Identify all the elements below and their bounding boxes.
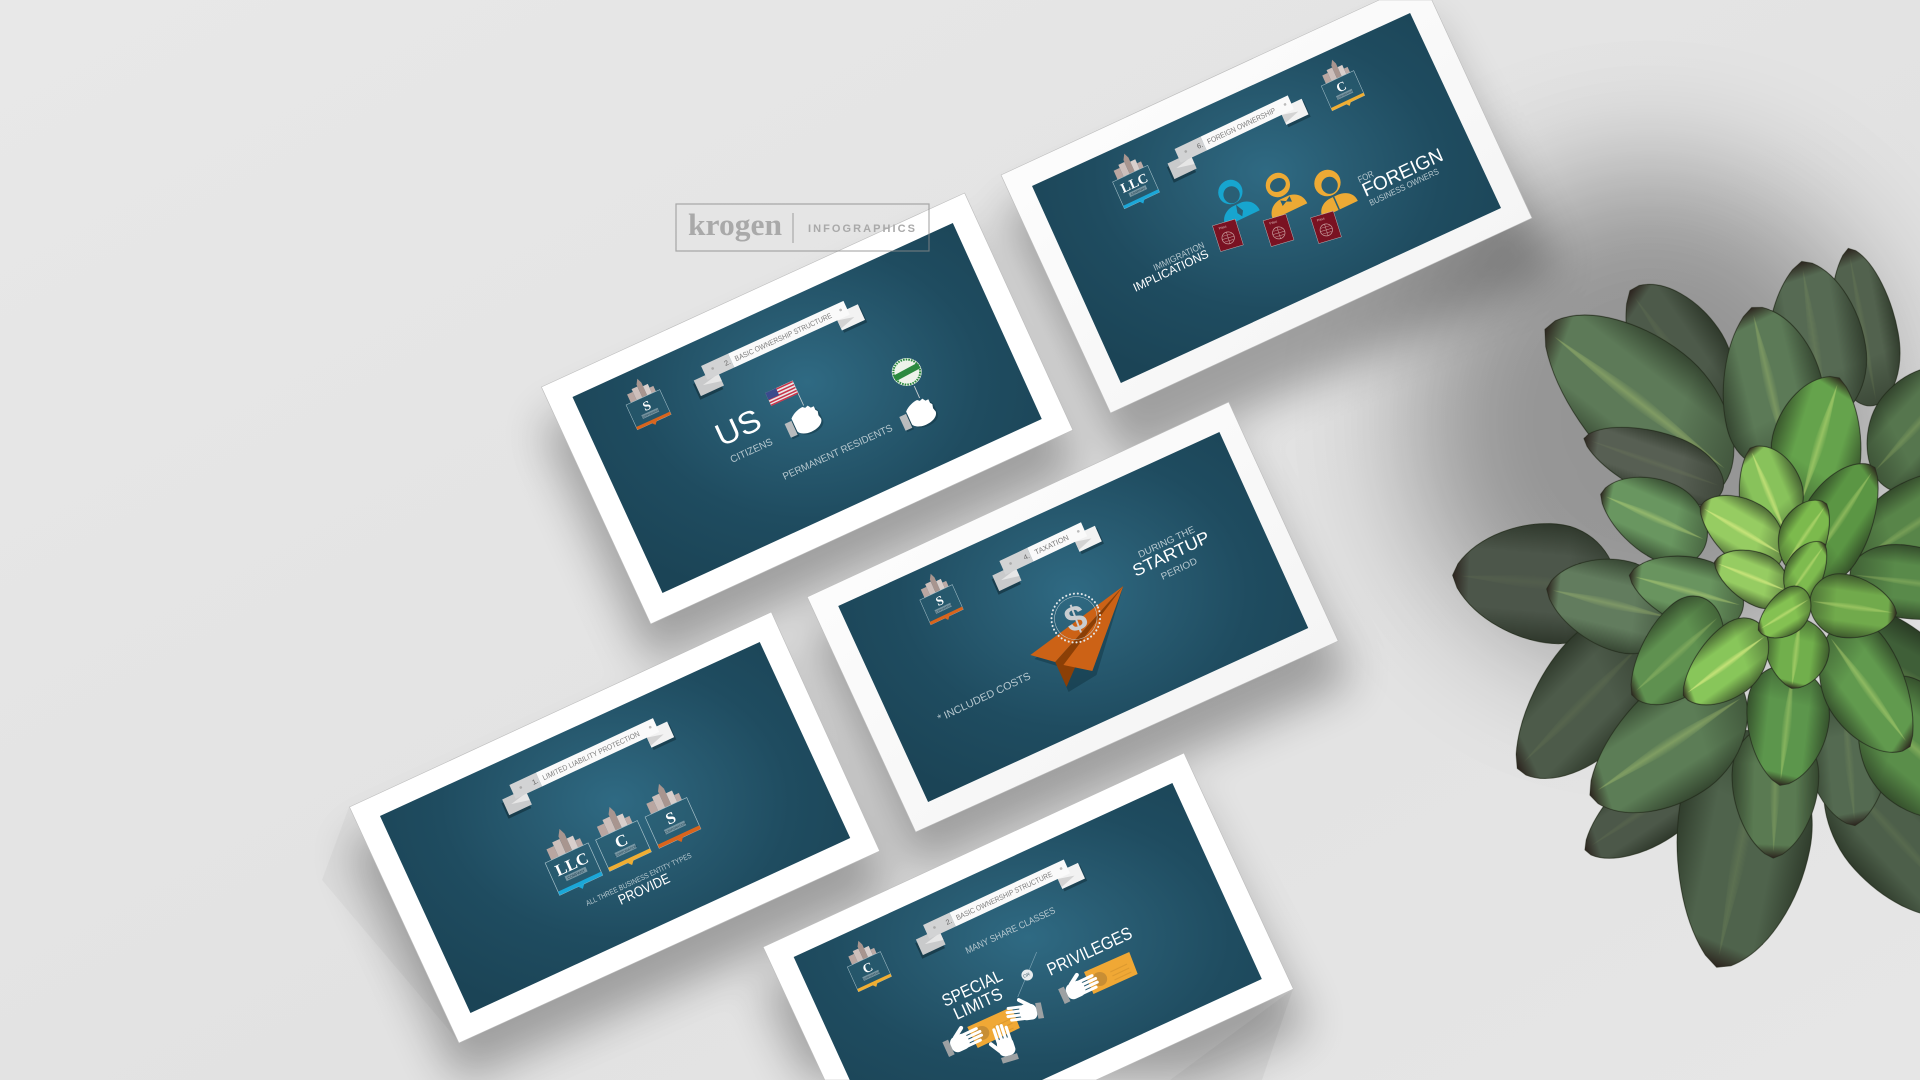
badge: C corporation: C bbox=[1334, 78, 1349, 95]
badge: C corporation: CORPORATION bbox=[1336, 90, 1354, 100]
text: included costs: * INCLUDED COSTS bbox=[936, 670, 1032, 725]
badge: C corporation bbox=[839, 934, 893, 995]
logo: krogen infographics: INFOGRAPHICS bbox=[808, 223, 915, 235]
icon: orange business owner bbox=[1256, 166, 1307, 220]
text: US: US bbox=[710, 402, 767, 453]
icon: green card stamp on stick bbox=[892, 358, 922, 398]
badge: LLC company: LLC bbox=[552, 848, 591, 880]
icon: hand holding privileges certificate bbox=[1056, 968, 1100, 1004]
banner: basic ownership structure: BASIC OWNERSHIP STRUCTURE bbox=[955, 870, 1054, 922]
panel: limited liability protection slide bbox=[349, 612, 880, 1043]
icon: yellow share certificate, limits bbox=[967, 1007, 1020, 1048]
panel: many share classes slide bbox=[763, 753, 1293, 1080]
badge: C corporation: C bbox=[860, 959, 875, 976]
icon: right hand holding certificate bbox=[1005, 997, 1044, 1022]
banner: limited liability protection: 1. bbox=[531, 777, 540, 787]
banner: taxation: TAXATION bbox=[1033, 533, 1070, 557]
icon: fist holding flag bbox=[781, 401, 826, 442]
icon: bottom hand holding certificate bbox=[986, 1024, 1019, 1065]
icon: fist holding stamp bbox=[896, 394, 941, 435]
banner: basic ownership structure: BASIC OWNERSHIP STRUCTURE bbox=[733, 311, 833, 363]
text: period: PERIOD bbox=[1159, 556, 1199, 583]
badge: S corporation bbox=[635, 776, 702, 852]
icon: passport three: Pass bbox=[1316, 216, 1325, 223]
banner: basic ownership structure: 2. bbox=[945, 917, 953, 927]
text: permanent residents: PERMANENT RESIDENTS bbox=[781, 423, 895, 483]
icon: US flag on pole bbox=[765, 381, 804, 418]
badge: LLC company: COMPANY bbox=[567, 868, 586, 880]
text: all three business entity types: ALL THREE BUSINESS ENTITY TYPES bbox=[584, 851, 693, 908]
text: citizens: CITIZENS bbox=[729, 437, 775, 466]
badge: S corporation: CORPORATION bbox=[641, 408, 660, 419]
banner: limited liability protection bbox=[496, 713, 677, 819]
badge: C corporation: CORPORATION bbox=[614, 844, 638, 858]
badge: S corporation: S bbox=[663, 807, 679, 829]
text: implications: IMPLICATIONS bbox=[1131, 247, 1211, 295]
banner: taxation bbox=[986, 517, 1104, 595]
panel: foreign ownership slide bbox=[1001, 0, 1532, 413]
badge: C corporation: C bbox=[612, 830, 631, 852]
badge: C corporation bbox=[1314, 53, 1366, 114]
or divider: OR bbox=[1022, 971, 1031, 979]
badge: LLC company: LLC bbox=[1118, 170, 1150, 196]
icon: passport one bbox=[1212, 219, 1243, 252]
badge: S corporation: CORPORATION bbox=[664, 821, 688, 835]
icon: passport two bbox=[1263, 214, 1294, 247]
badge: S corporation: CORPORATION bbox=[934, 604, 953, 614]
banner: basic ownership structure: 2. bbox=[723, 357, 732, 368]
text: many share classes: MANY SHARE CLASSES bbox=[964, 905, 1058, 957]
banner: taxation: 4. bbox=[1022, 552, 1031, 562]
badge: S corporation: S bbox=[640, 397, 653, 414]
plant: succulent bbox=[1450, 236, 1920, 994]
icon: left hand holding certificate bbox=[940, 1021, 984, 1057]
banner: foreign ownership: FOREIGN OWNERSHIP bbox=[1206, 106, 1277, 146]
icon: passport three bbox=[1311, 211, 1341, 244]
icon: orange paper plane with dollar coin bbox=[1030, 585, 1123, 692]
text: provide: PROVIDE bbox=[616, 871, 673, 909]
banner: basic ownership structure bbox=[688, 296, 868, 400]
icon: yellow share certificate, privileges bbox=[1084, 952, 1138, 994]
icon: blue business owner bbox=[1209, 173, 1260, 227]
badge: S corporation: S bbox=[933, 592, 946, 609]
icon: orange paper plane with dollar coin: $ bbox=[1059, 596, 1092, 641]
badge: LLC company bbox=[1104, 147, 1161, 212]
text: startup: STARTUP bbox=[1129, 527, 1212, 581]
panel: taxation slide bbox=[807, 402, 1338, 832]
badge: LLC company bbox=[535, 820, 604, 899]
badge: C corporation bbox=[586, 799, 653, 875]
banner: limited liability protection: LIMITED LIABILITY PROTECTION bbox=[541, 729, 641, 782]
icon: passport one: Pass bbox=[1218, 224, 1227, 231]
banner: foreign ownership bbox=[1162, 90, 1311, 183]
text: immigration: IMMIGRATION bbox=[1152, 240, 1206, 273]
badge: S corporation bbox=[618, 372, 672, 433]
text: for: FOR bbox=[1356, 169, 1375, 185]
banner: foreign ownership: 6. bbox=[1196, 141, 1204, 151]
badge: C corporation: CORPORATION bbox=[862, 970, 881, 981]
text: during the: DURING THE bbox=[1137, 524, 1197, 561]
badge: LLC company: COMPANY bbox=[1130, 186, 1146, 196]
logo: krogen infographics bbox=[676, 204, 929, 251]
icon: orange female business owner bbox=[1305, 162, 1358, 218]
banner: basic ownership structure bbox=[910, 854, 1088, 959]
or divider bbox=[1018, 952, 1037, 997]
panel: basic ownership structure, US citizens slide bbox=[541, 193, 1073, 624]
text: special: SPECIAL bbox=[939, 965, 1006, 1011]
logo: krogen infographics: krogen bbox=[688, 207, 782, 242]
text: business owners: BUSINESS OWNERS bbox=[1368, 166, 1440, 208]
text: foreign: FOREIGN bbox=[1359, 145, 1447, 202]
text: limits: LIMITS bbox=[950, 984, 1006, 1024]
icon: passport two: Pass bbox=[1269, 219, 1278, 226]
text: privileges: PRIVILEGES bbox=[1044, 923, 1135, 980]
badge: S corporation bbox=[912, 567, 965, 628]
